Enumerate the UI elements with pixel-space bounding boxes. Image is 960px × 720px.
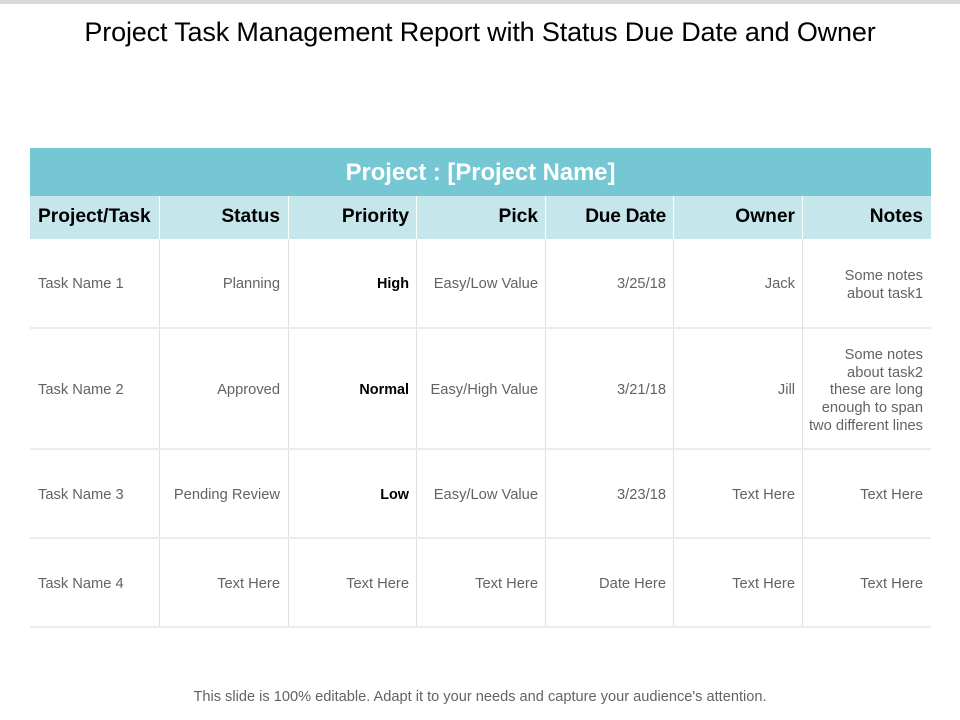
row: task 2: Normal [359,382,409,398]
row: task 3: Low [380,487,409,503]
row: task 2: Approved [217,382,280,398]
notes: task 2 [809,347,923,434]
footer note: This slide is 100% editable. Adapt it to your needs and capture your audience's attention. [193,689,767,705]
row: task 4: Text Here [346,576,409,592]
notes: task 1: Some notes [845,268,923,284]
row: task 4: Text Here [475,576,538,592]
project banner [30,148,931,196]
row: task 1 [38,276,795,292]
row: task 3: Text Here [860,487,923,503]
header row: Priority [342,206,409,227]
notes: task 2: these are long [830,382,923,398]
row: task 4: Text Here [732,576,795,592]
table [30,148,931,628]
header row [30,196,931,239]
row: task 1: Easy/Low Value [434,276,538,292]
top bar [0,0,960,4]
header row: Due Date [585,206,666,227]
header row: Owner [735,206,795,227]
row: task 4: Task Name 4 [38,576,124,592]
notes: task 2: about task2 [847,365,923,381]
row: task 3: Easy/Low Value [434,487,538,503]
notes: task 2: enough to span [822,400,923,416]
row: task 2 [38,382,795,398]
row: task 2: 3/21/18 [617,382,666,398]
notes: task 2: two different lines [809,418,923,434]
row: task 3: Pending Review [174,487,280,503]
row: task 1: Planning [223,276,280,292]
row: task 4 [38,576,923,592]
row: task 1: Jack [765,276,795,292]
notes: task 1: about task1 [847,286,923,302]
header row: Pick [499,206,538,227]
grid lines [30,239,931,628]
row: task 1: High [377,276,409,292]
row: task 3: 3/23/18 [617,487,666,503]
notes: task 2: Some notes [845,347,923,363]
row: task 4: Text Here [860,576,923,592]
row: task 2: Task Name 2 [38,382,124,398]
row: task 1: Task Name 1 [38,276,124,292]
row: task 4: Text Here [217,576,280,592]
title: Project Task Management Report with Status Due Date and Owner [84,17,876,47]
row: task 3 [38,487,923,503]
header row: Status [221,206,280,227]
header row: Notes [870,206,923,227]
row: task 3: Text Here [732,487,795,503]
row: task 4: Date Here [599,576,666,592]
row: task 2: Easy/High Value [430,382,538,398]
project banner: Project : [Project Name] [346,159,615,186]
row: task 3: Task Name 3 [38,487,124,503]
row: task 2: Jill [778,382,795,398]
header row: Project/Task [38,206,151,227]
row: task 1: 3/25/18 [617,276,666,292]
notes: task 1 [845,268,923,302]
